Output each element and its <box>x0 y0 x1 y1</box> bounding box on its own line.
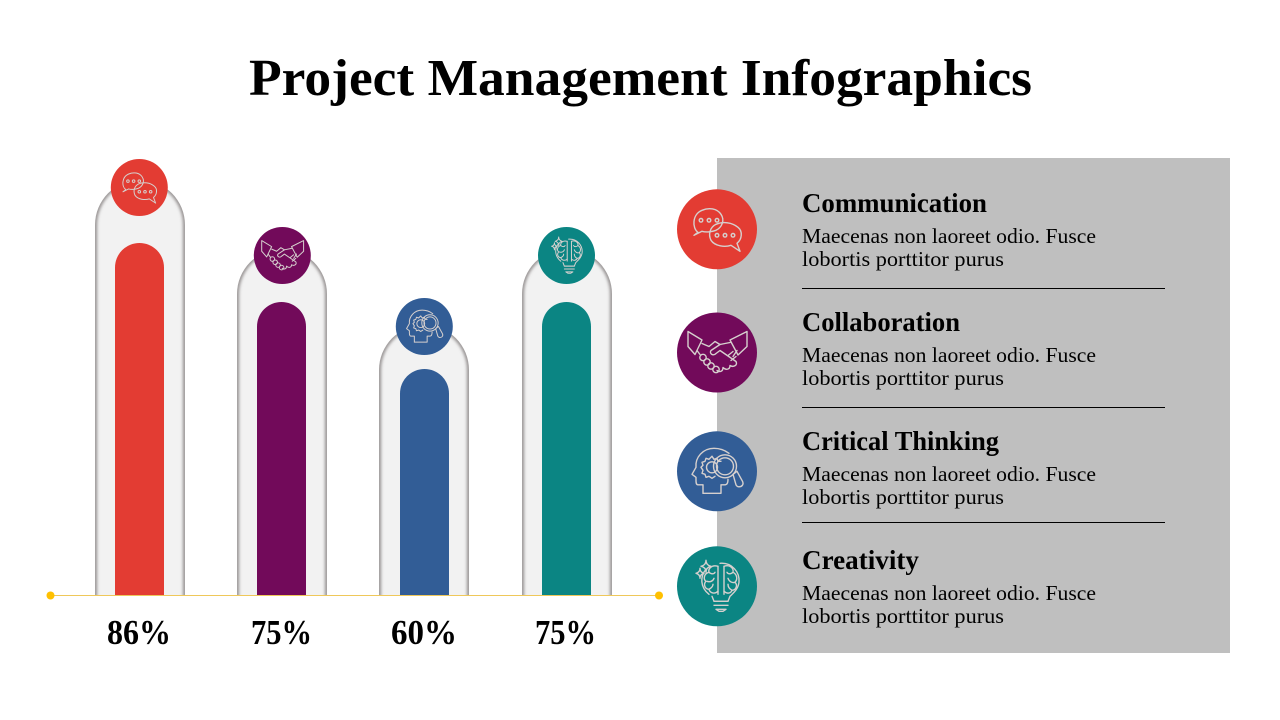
list item: collaboration: Collaboration <box>802 307 960 337</box>
chart: progress bars <box>46 159 663 652</box>
list item: collaboration: lobortis porttitor purus <box>802 366 1004 390</box>
list item: critical thinking: Critical Thinking <box>802 426 999 456</box>
bar: critical thinking 60% <box>379 298 469 652</box>
list item: creativity: Creativity <box>802 545 919 575</box>
list item: creativity <box>677 545 1096 628</box>
list item: creativity: Maecenas non laoreet odio. Fusce <box>802 581 1096 605</box>
list item: communication: lobortis porttitor purus <box>802 247 1004 271</box>
axis line with end dots <box>46 592 663 600</box>
list item: critical thinking: Maecenas non laoreet odio. Fusce <box>802 462 1096 486</box>
panel: grey background <box>717 158 1230 653</box>
title: Project Management Infographics <box>249 50 1032 107</box>
bar: collaboration 75% <box>237 227 327 652</box>
bar: creativity 75%: 75% <box>535 613 596 652</box>
bar: creativity 75% <box>522 227 612 652</box>
list item: communication <box>677 188 1096 271</box>
bar: communication 86%: 86% <box>107 613 171 652</box>
list item: communication: Maecenas non laoreet odio. Fusce <box>802 224 1096 248</box>
list item: critical thinking <box>677 426 1096 511</box>
list item: collaboration <box>677 307 1096 392</box>
bar: communication 86% <box>95 159 185 652</box>
bar: critical thinking 60%: 60% <box>391 613 457 652</box>
list item: collaboration: Maecenas non laoreet odio. Fusce <box>802 343 1096 367</box>
list item: communication: Communication <box>802 188 987 218</box>
bar: collaboration 75%: 75% <box>251 613 312 652</box>
list item: critical thinking: lobortis porttitor purus <box>802 485 1004 509</box>
list item: creativity: lobortis porttitor purus <box>802 604 1004 628</box>
